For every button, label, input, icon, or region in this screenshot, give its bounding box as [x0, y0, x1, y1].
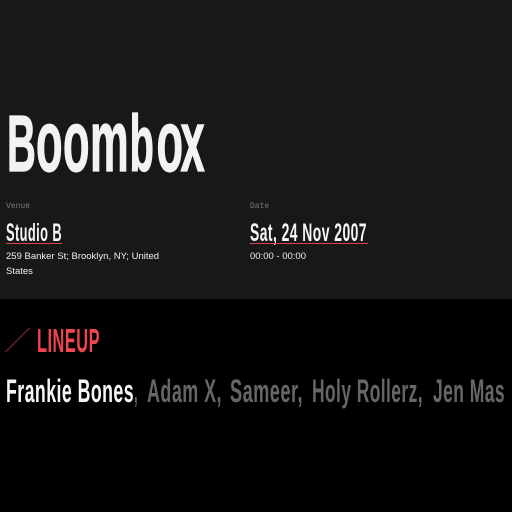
- venue address: 259 Banker St; Brooklyn, NY; United: [6, 251, 159, 262]
- panel: lineup: LINEUP: [37, 322, 100, 359]
- artist list: Adam X,: [147, 373, 222, 409]
- panel: lineup: [6, 322, 505, 409]
- date value: Sat, 24 Nov 2007: [250, 219, 367, 247]
- date label: Date: [250, 202, 269, 211]
- venue label: Venue: [6, 202, 30, 211]
- date block: [250, 202, 368, 262]
- venue name: [6, 219, 62, 247]
- artist list: [6, 373, 505, 409]
- artist list: Frankie Bones: [6, 373, 134, 409]
- artist list: ,: [134, 373, 138, 409]
- icon: slash: [6, 328, 30, 352]
- venue block: [6, 202, 159, 277]
- title: Boombox: [7, 93, 205, 190]
- artist list: Sameer,: [230, 373, 303, 409]
- venue address: States: [6, 266, 33, 277]
- time range: 00:00 - 00:00: [250, 251, 306, 262]
- venue name: Studio B: [6, 219, 62, 247]
- artist list: Holy Rollerz,: [312, 373, 423, 409]
